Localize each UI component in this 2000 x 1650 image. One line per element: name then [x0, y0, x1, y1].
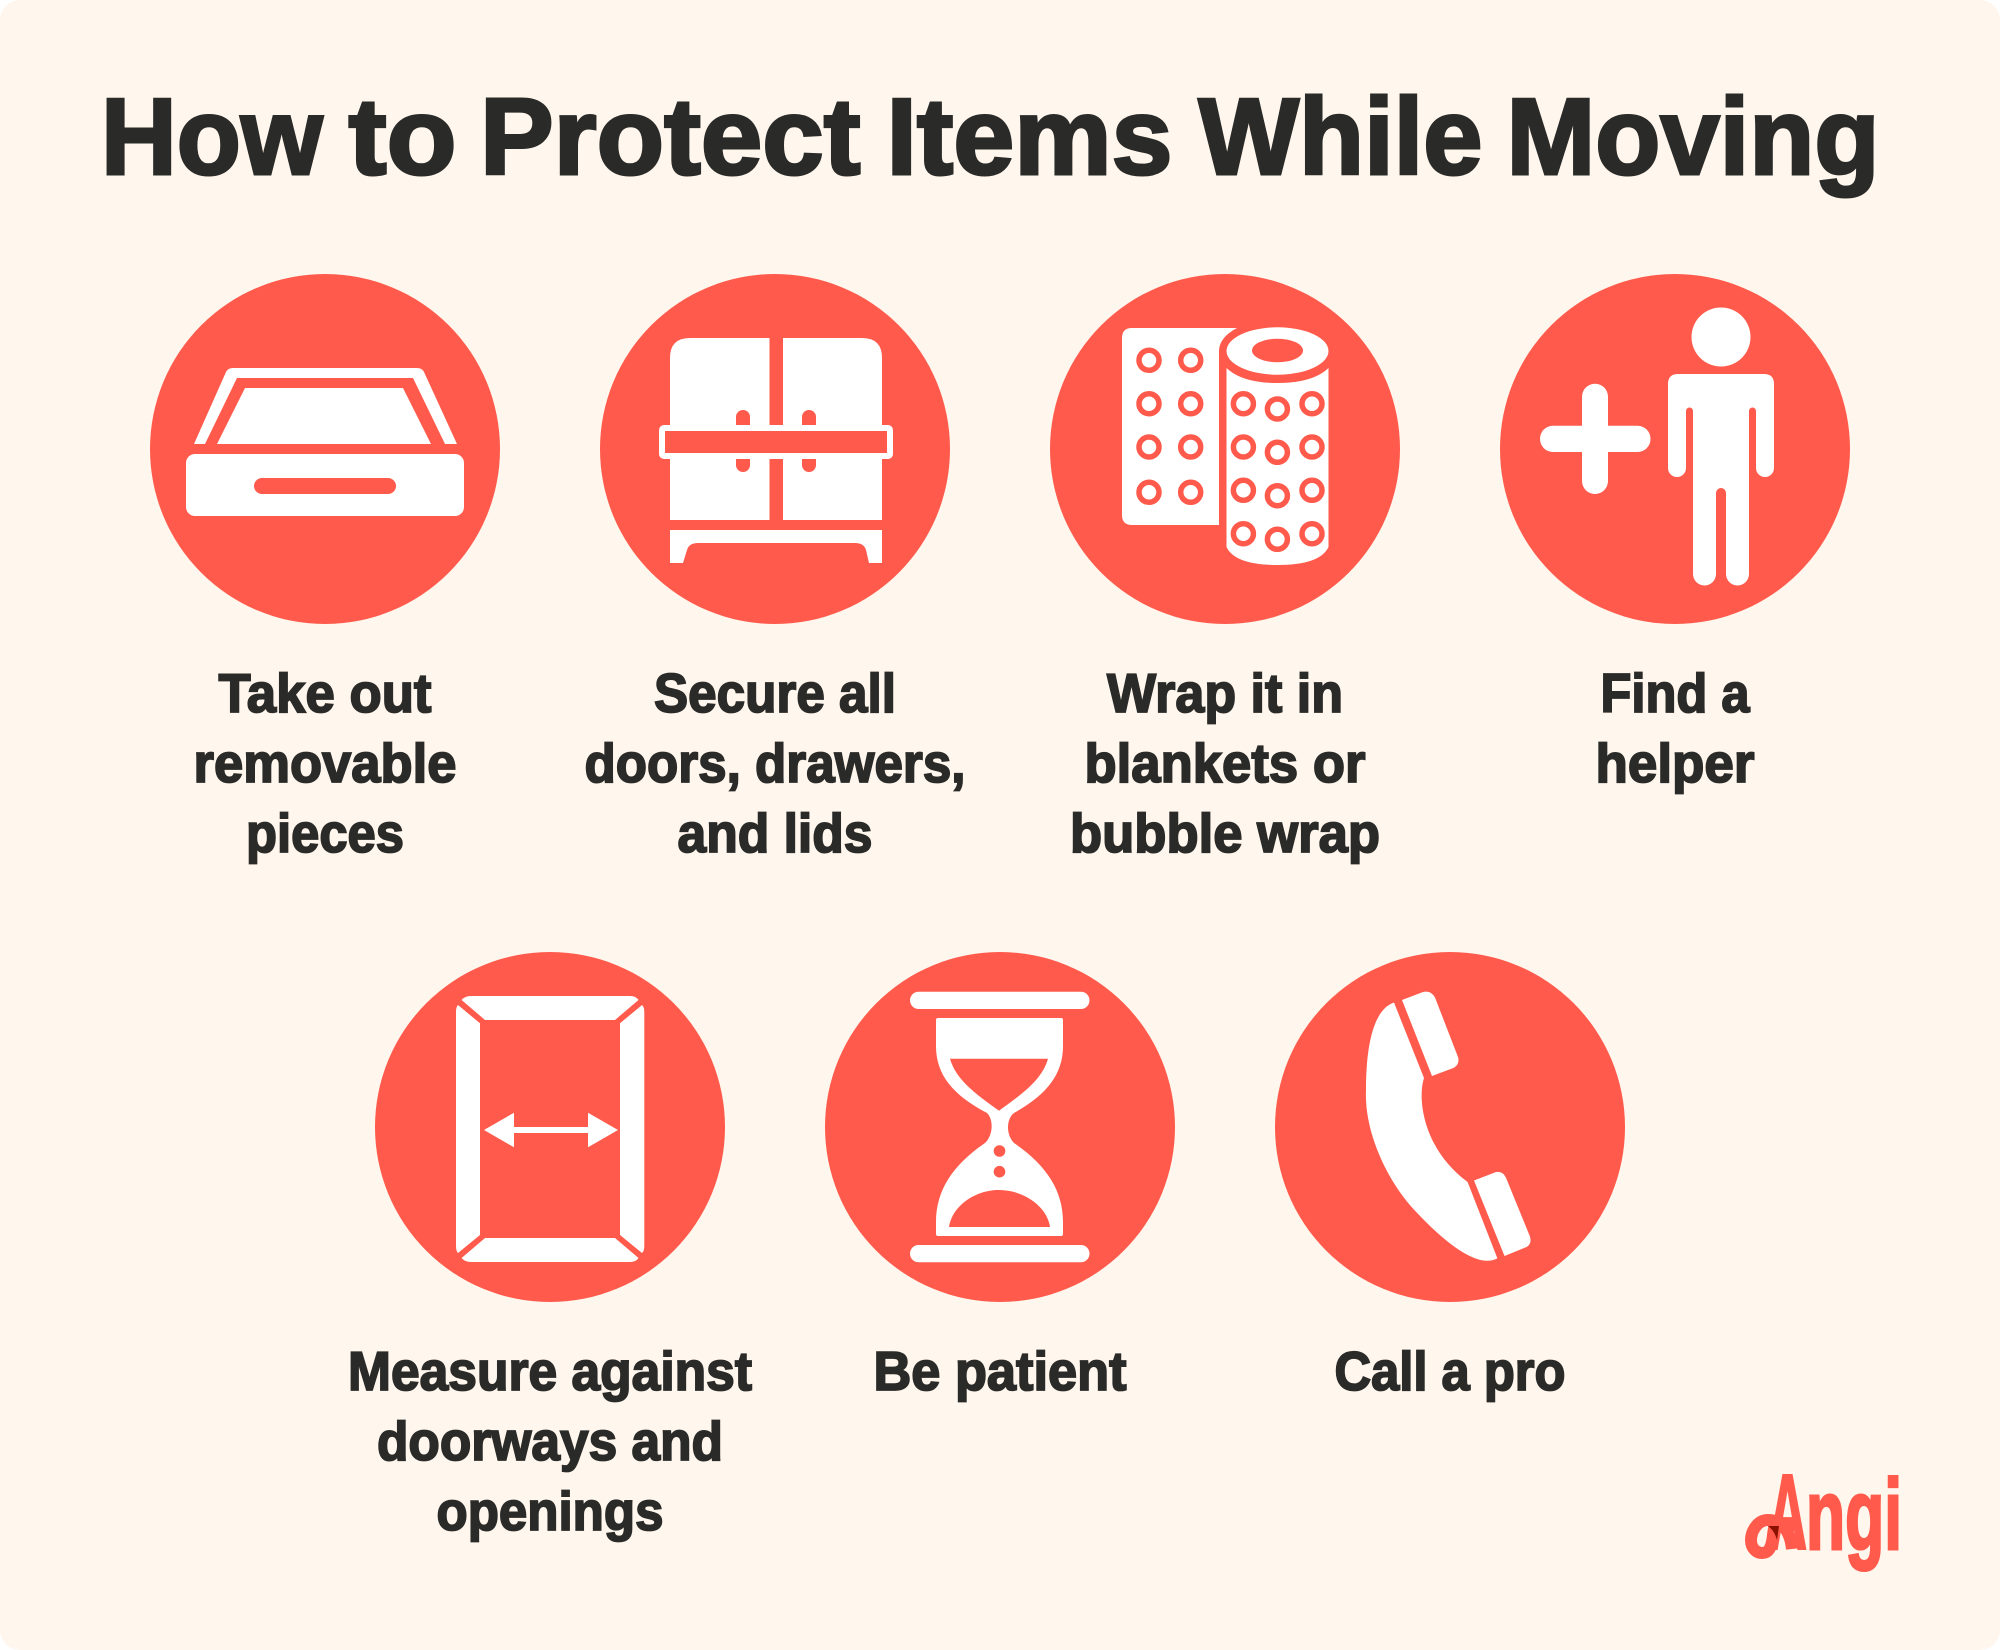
title: Items: [886, 76, 1172, 198]
label: [584, 662, 966, 864]
panel: secure doors: [584, 274, 966, 864]
label: Secure all: [654, 662, 896, 724]
logo: Angi: [1751, 1452, 1902, 1572]
label: pieces: [246, 802, 404, 864]
label: Be patient: [874, 1340, 1126, 1402]
title: Protect: [480, 76, 860, 198]
label: bubble wrap: [1070, 802, 1380, 864]
logo: Angi: A: [1768, 1452, 1807, 1572]
icon: telephone handset: [1275, 952, 1625, 1302]
label: openings: [436, 1480, 664, 1542]
panel: take out removable pieces: [150, 274, 500, 864]
icon: bubble wrap roll: [1050, 274, 1400, 624]
logo: Angi: ngi: [1806, 1459, 1902, 1571]
label: Wrap it in: [1107, 662, 1343, 724]
title: While: [1198, 76, 1482, 198]
label: Call a pro: [1334, 1340, 1566, 1402]
label: [194, 662, 456, 864]
panel: wrap it: [1050, 274, 1400, 864]
panel: call a pro: [1275, 952, 1625, 1402]
label: removable: [194, 732, 456, 794]
icon: hourglass: [825, 952, 1175, 1302]
label: [1596, 662, 1754, 794]
label: helper: [1596, 732, 1754, 794]
title: to: [348, 76, 456, 198]
icon: plus and person: [1500, 274, 1850, 624]
label: [348, 1340, 752, 1542]
title: [101, 76, 1880, 198]
panel: measure: [348, 952, 752, 1542]
label: Find a: [1600, 662, 1750, 724]
label: Measure against: [348, 1340, 752, 1402]
label: blankets or: [1084, 732, 1366, 794]
title: Moving: [1506, 76, 1880, 198]
label: doorways and: [377, 1410, 723, 1472]
icon: drawer: [150, 274, 500, 624]
icon: strapped cabinet: [600, 274, 950, 624]
panel: be patient: [825, 952, 1175, 1402]
label: doors, drawers,: [584, 732, 966, 794]
label: [1070, 662, 1380, 864]
icon: doorway with width arrow: [375, 952, 725, 1302]
panel: find a helper: [1500, 274, 1850, 794]
label: and lids: [678, 802, 872, 864]
title: How: [101, 76, 323, 198]
label: Take out: [218, 662, 432, 724]
